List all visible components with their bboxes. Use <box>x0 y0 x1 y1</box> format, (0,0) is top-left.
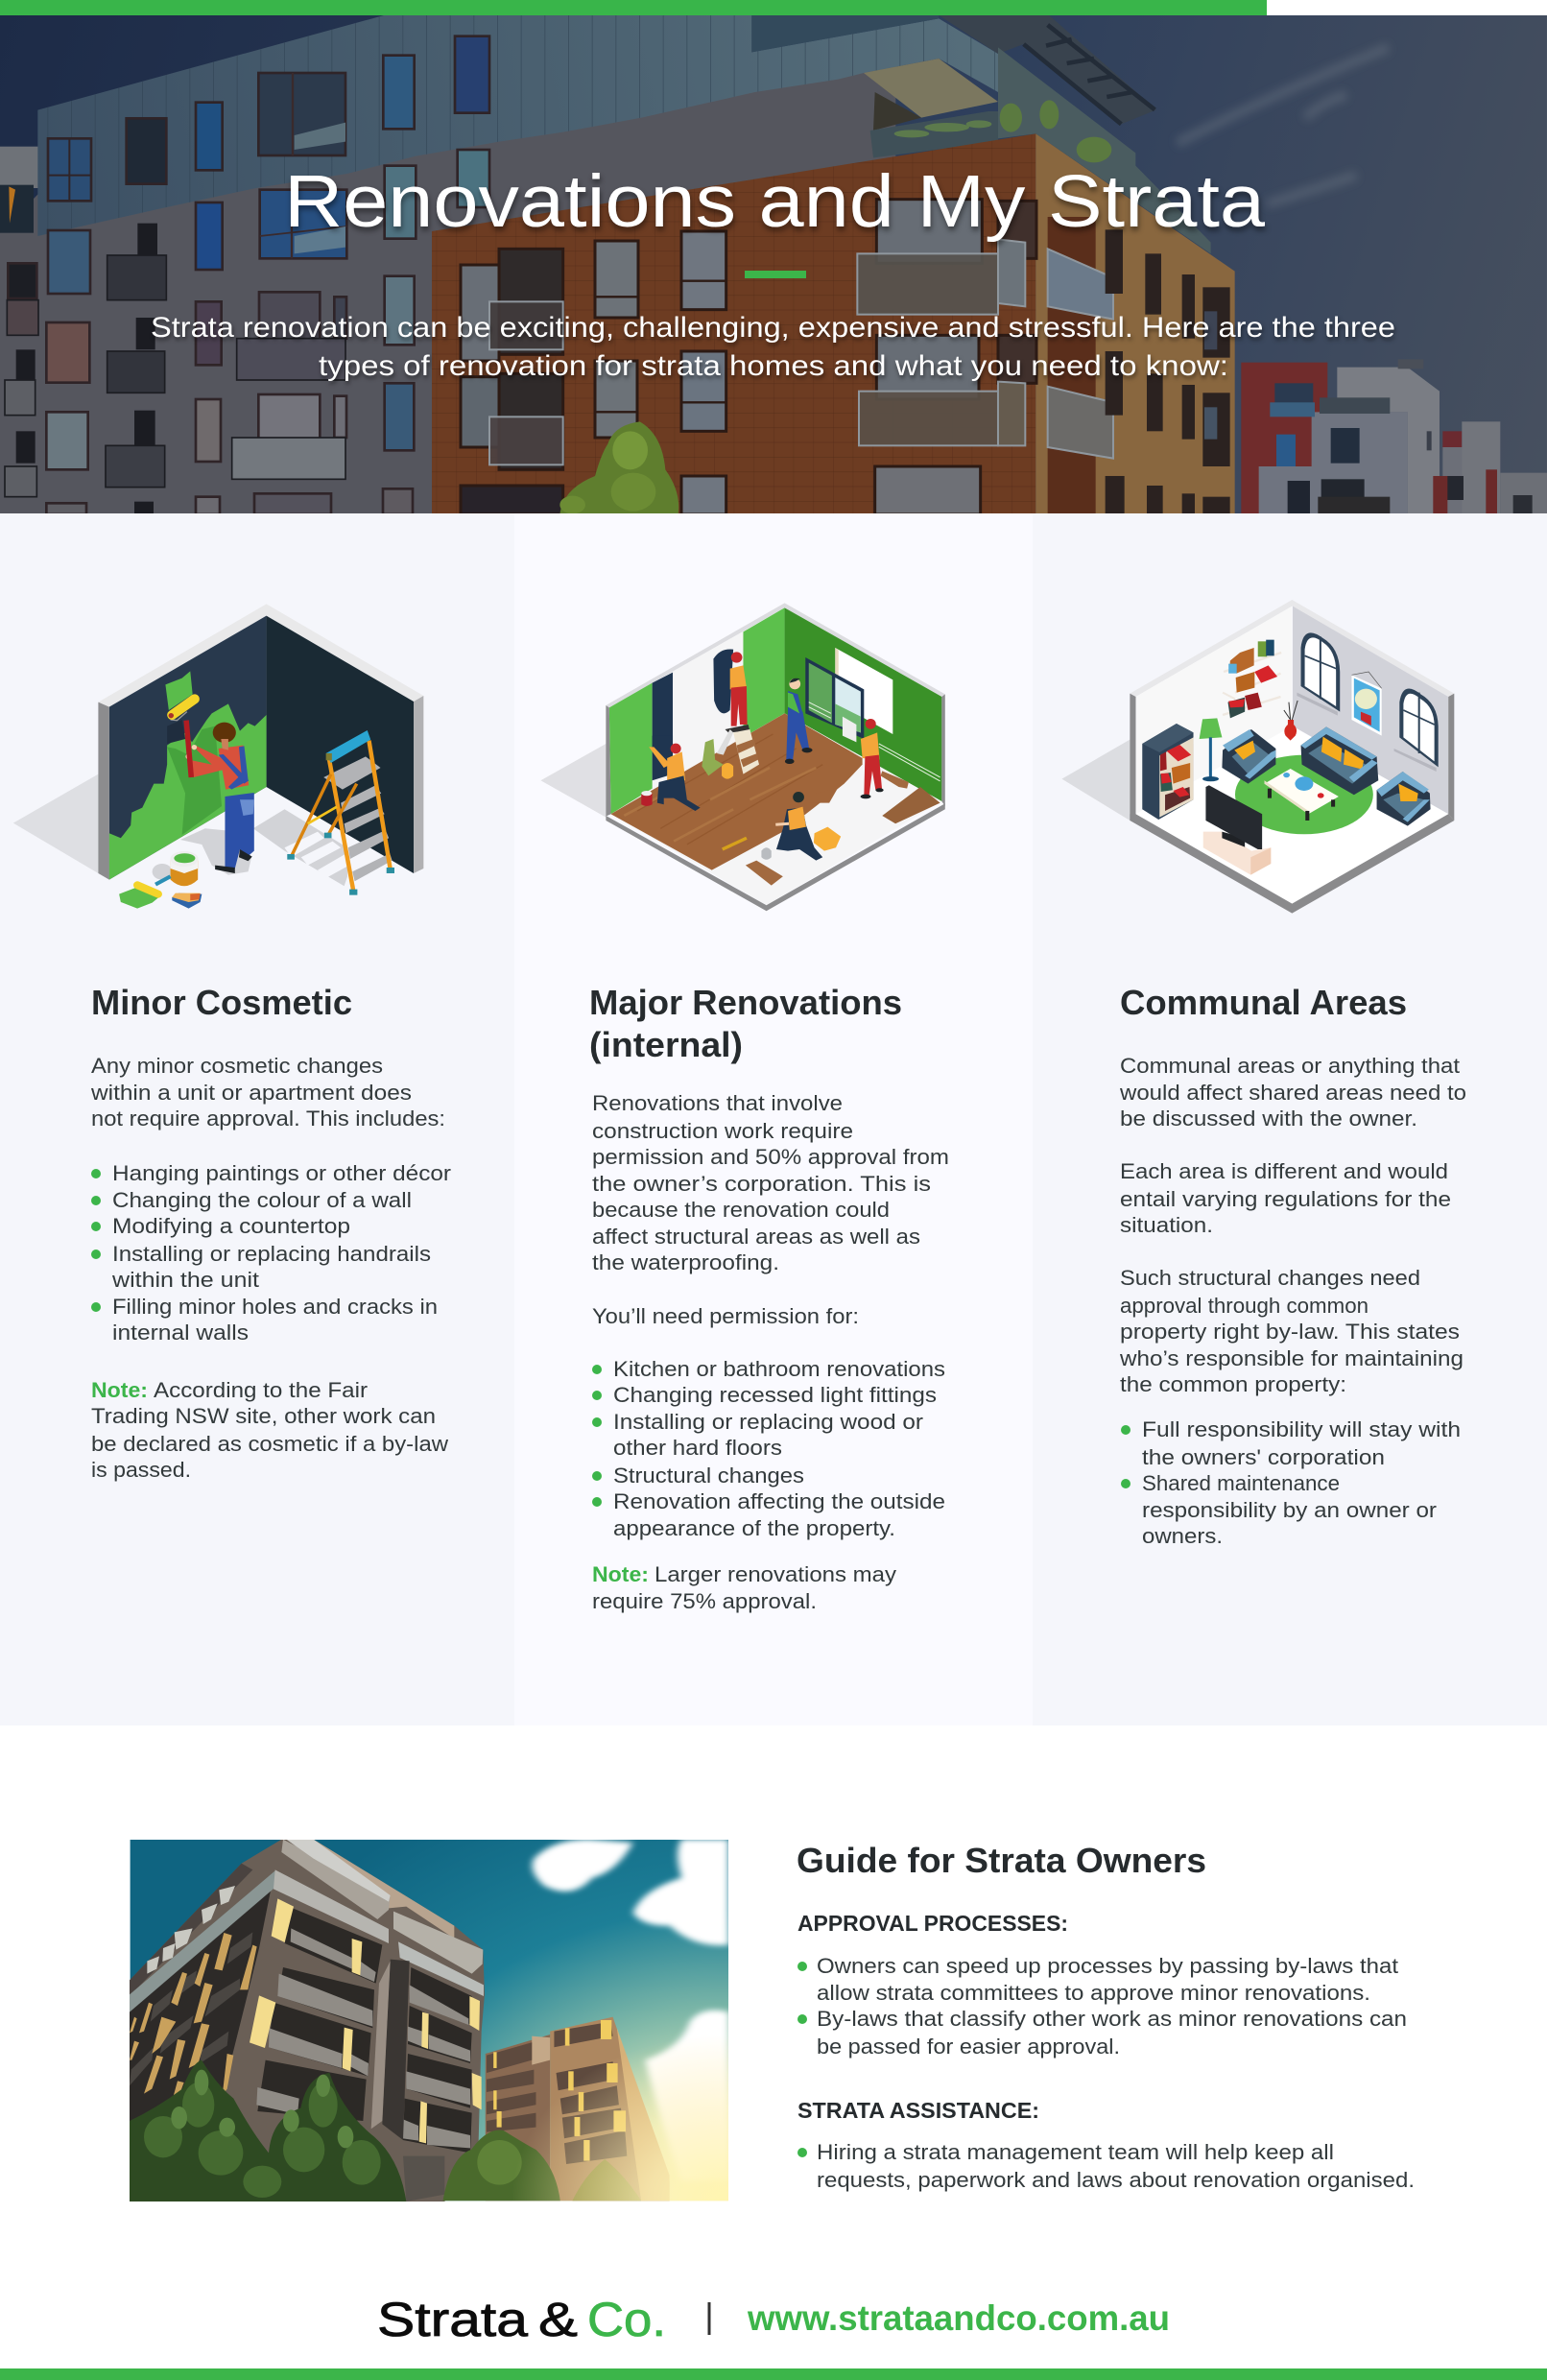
text: major renovations intro: affect structural areas as well as <box>592 1225 920 1249</box>
panel: major renovations <box>514 513 1033 1726</box>
text: major renovations intro: permission and 50% approval from <box>592 1145 949 1169</box>
vase <box>1284 701 1297 741</box>
note: larger renovations: require 75% approval. <box>592 1589 817 1613</box>
heading: communal areas: Communal Areas <box>1120 983 1407 1022</box>
hero intro text: types of renovation for strata homes and what you need to know: <box>319 350 1228 382</box>
kneeling worker with wallpaper <box>641 736 701 811</box>
tree <box>559 421 678 514</box>
bullet list: permission items: Structural changes <box>613 1464 804 1488</box>
bullet list: maintenance responsibility: responsibility by an owner or <box>1142 1498 1438 1522</box>
floor layer and tools <box>723 771 909 886</box>
worker holding window <box>861 719 884 798</box>
bookcase <box>1142 724 1194 820</box>
top progress bar <box>0 0 1267 15</box>
text: major renovations intro: the waterproofing. <box>592 1250 779 1274</box>
section: approval processes: By-laws that classify other work as minor renovations can <box>817 2007 1407 2031</box>
text: major renovations intro <box>592 1091 949 1328</box>
bullet list: permission items <box>592 1357 945 1540</box>
note: fair trading <box>91 1378 449 1482</box>
logo: Strata & Co.: Strata <box>377 2293 528 2346</box>
heading: major renovations: Major Renovations <box>589 983 902 1022</box>
text: communal areas paragraphs: entail varying regulations for the <box>1120 1187 1451 1211</box>
hero photo: apartment building with dark overlay <box>0 15 1547 514</box>
text: major renovations intro: You’ll need permission for: <box>592 1304 859 1328</box>
armchair right <box>1377 772 1431 826</box>
text: communal areas paragraphs: Each area is different and would <box>1120 1159 1448 1183</box>
note: larger renovations: Note: <box>592 1562 649 1586</box>
text: communal areas paragraphs: Such structural changes need <box>1120 1266 1420 1290</box>
section: strata assistance <box>797 2098 1415 2192</box>
window being fitted <box>805 657 940 781</box>
bullet list: permission items: other hard floors <box>613 1436 782 1460</box>
text: major renovations intro: because the renovation could <box>592 1198 890 1222</box>
icon: living room isometric <box>1061 600 1454 914</box>
photo: apartment buildings in sunlight <box>130 1839 729 2202</box>
section: strata assistance: STRATA ASSISTANCE: <box>797 2098 1039 2123</box>
bullet list: cosmetic changes: Modifying a countertop <box>112 1214 350 1238</box>
section: strata assistance: Hiring a strata management team will help keep all <box>817 2140 1334 2164</box>
text: communal areas paragraphs: situation. <box>1120 1213 1213 1237</box>
bullet list: maintenance responsibility <box>1121 1417 1461 1548</box>
foreground trees <box>130 2060 406 2202</box>
right neighbouring buildings <box>1241 359 1547 514</box>
text: major renovations intro: construction work require <box>592 1119 853 1143</box>
bullet list: permission items: Changing recessed light fittings <box>613 1383 937 1407</box>
text: minor cosmetic intro: not require approval. This includes: <box>91 1107 445 1130</box>
hero title: Renovations and My Strata <box>284 160 1265 243</box>
television on stand <box>1203 785 1271 875</box>
logo: Strata & Co.: & <box>538 2293 578 2346</box>
section: approval processes: Owners can speed up processes by passing by-laws that <box>817 1954 1399 1978</box>
arched windows <box>1297 632 1439 772</box>
bullet list: cosmetic changes: Installing or replacing handrails <box>112 1242 431 1266</box>
text: minor cosmetic intro <box>90 1054 445 1130</box>
left facade windows <box>8 36 489 514</box>
right tan facade windows <box>1106 229 1230 514</box>
bullet list: cosmetic changes: Changing the colour of a wall <box>112 1188 412 1212</box>
bullet list: cosmetic changes: internal walls <box>112 1321 249 1345</box>
wall shelves with books <box>1223 640 1281 718</box>
wall picture <box>1351 672 1382 736</box>
text: minor cosmetic intro: Any minor cosmetic changes <box>91 1054 383 1078</box>
note: larger renovations: Larger renovations may <box>654 1562 897 1586</box>
floor roller and swatches <box>119 876 202 909</box>
panel: minor cosmetic <box>0 513 514 1726</box>
text: communal areas paragraphs: Communal areas or anything that <box>1120 1054 1461 1078</box>
bullet list: maintenance responsibility: Shared maintenance <box>1142 1471 1340 1495</box>
icon: painter isometric room <box>13 604 423 909</box>
bullet list: maintenance responsibility: Full responsibility will stay with <box>1142 1417 1461 1441</box>
bottom green bar <box>0 2368 1547 2380</box>
footer divider <box>708 2302 710 2335</box>
text: communal areas paragraphs: be discussed with the owner. <box>1120 1107 1417 1130</box>
paint roller in use <box>169 699 195 777</box>
note: fair trading: According to the Fair <box>154 1378 369 1402</box>
section: approval processes: allow strata committees to approve minor renovations. <box>817 1981 1370 2005</box>
bullet list: maintenance responsibility: owners. <box>1142 1524 1223 1548</box>
step ladder <box>287 730 394 895</box>
bullet list: permission items: Kitchen or bathroom renovations <box>613 1357 945 1381</box>
text: communal areas paragraphs: property right by-law. This states <box>1120 1320 1460 1344</box>
text: communal areas paragraphs: who’s responsible for maintaining <box>1119 1346 1464 1370</box>
text: communal areas paragraphs <box>1119 1054 1466 1396</box>
text: communal areas paragraphs: would affect shared areas need to <box>1119 1081 1466 1105</box>
note: fair trading: Note: <box>91 1378 148 1402</box>
floor lamp <box>1200 718 1222 781</box>
heading: major renovations: (internal) <box>589 1025 743 1064</box>
text: major renovations intro: Renovations that involve <box>592 1091 843 1115</box>
bullet list: permission items: Renovation affecting the outside <box>613 1489 945 1513</box>
glass balconies <box>489 239 1113 464</box>
bullet list: permission items: appearance of the property. <box>613 1516 895 1540</box>
bullet list: cosmetic changes: within the unit <box>111 1268 260 1292</box>
bullet list: cosmetic changes: Hanging paintings or other décor <box>112 1161 452 1185</box>
logo: Strata & Co. <box>377 2293 666 2346</box>
note: fair trading: be declared as cosmetic if a by-law <box>91 1432 449 1456</box>
heading: minor cosmetic: Minor Cosmetic <box>91 983 352 1022</box>
icon: renovation crew isometric room <box>540 603 945 911</box>
note: fair trading: is passed. <box>91 1458 191 1482</box>
note: larger renovations <box>592 1562 897 1613</box>
left balconies <box>5 255 345 497</box>
centre windows and balconies <box>461 200 1036 514</box>
bullet list: cosmetic changes <box>91 1161 452 1345</box>
hero intro text: Strata renovation can be exciting, challenging, expensive and stressful. Here are the three <box>151 312 1395 344</box>
hero intro text <box>151 312 1395 382</box>
panel: communal areas <box>1033 513 1547 1726</box>
bullet list: permission items: Installing or replacing wood or <box>613 1410 924 1434</box>
section: approval processes: be passed for easier approval. <box>817 2035 1120 2059</box>
text: communal areas paragraphs: approval through common <box>1120 1294 1368 1318</box>
coffee table <box>1265 769 1339 821</box>
heading: major renovations <box>589 983 902 1064</box>
bullet list: cosmetic changes: Filling minor holes and cracks in <box>112 1295 438 1319</box>
worker in blue overalls <box>785 678 813 764</box>
wallpaper worker on ladder <box>702 649 759 779</box>
sofa <box>1301 726 1378 795</box>
bullet list: maintenance responsibility: the owners' corporation <box>1142 1445 1385 1469</box>
note: fair trading: Trading NSW site, other work can <box>91 1404 436 1428</box>
section: approval processes <box>797 1911 1407 2059</box>
armchair left <box>1222 729 1275 784</box>
text: communal areas paragraphs: the common property: <box>1120 1372 1346 1396</box>
section: strata assistance: requests, paperwork and laws about renovation organised. <box>817 2168 1415 2192</box>
text: major renovations intro: the owner’s corporation. This is <box>592 1172 931 1196</box>
website url: www.strataandco.com.au <box>747 2298 1170 2338</box>
painter figure <box>185 723 254 873</box>
title accent dash <box>745 271 806 278</box>
text: minor cosmetic intro: within a unit or apartment does <box>90 1081 412 1105</box>
heading: guide for strata owners: Guide for Strata Owners <box>797 1841 1206 1880</box>
section: approval processes: APPROVAL PROCESSES: <box>797 1911 1068 1936</box>
logo: Strata & Co.: Co. <box>587 2293 666 2346</box>
paint can <box>171 851 199 886</box>
